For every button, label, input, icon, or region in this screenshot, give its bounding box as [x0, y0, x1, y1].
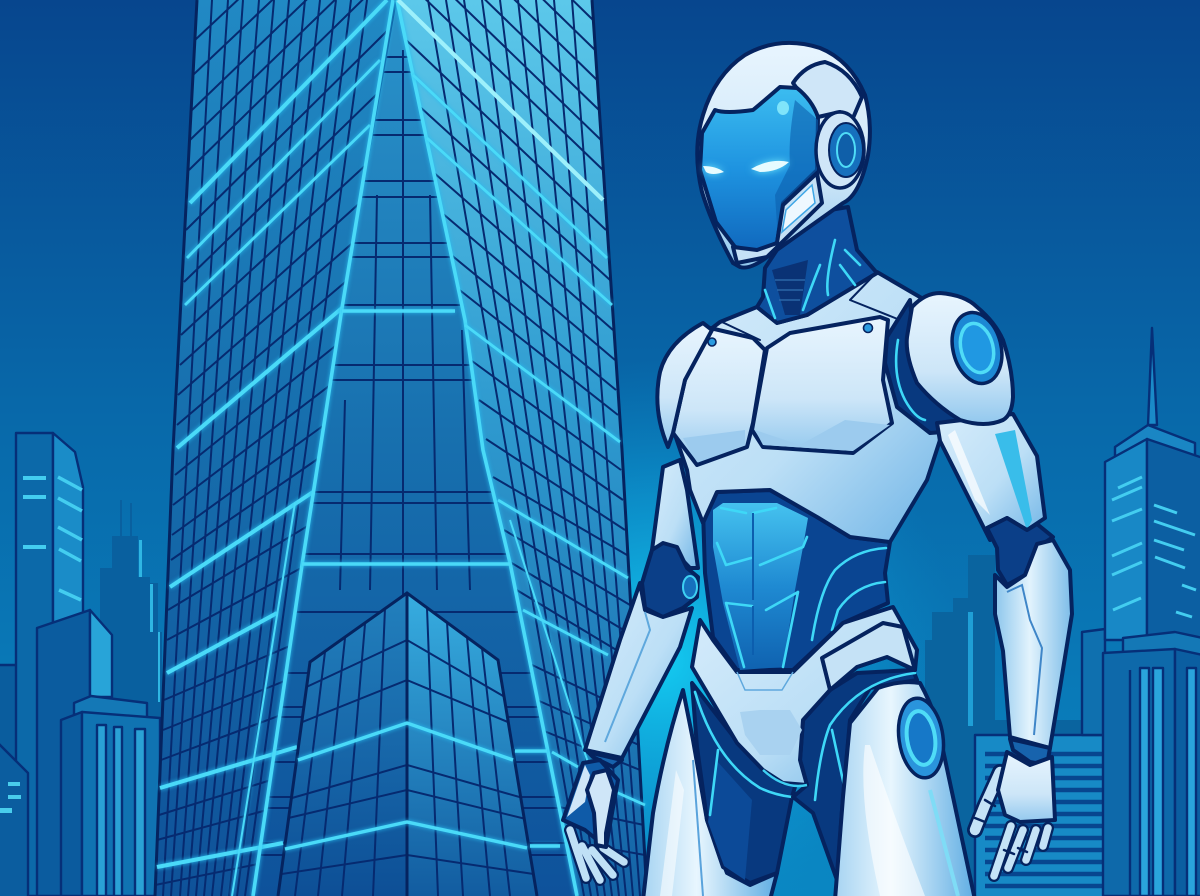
- main skyscraper: [155, 0, 647, 896]
- building: front left block with window strips: [61, 696, 160, 896]
- tower: dark outer edges: [155, 0, 647, 896]
- tower: further neon bands, right face: [413, 75, 645, 805]
- tower: neon band highlight, right face: [398, 0, 603, 200]
- building: far left lower block: [0, 665, 19, 896]
- robot: left shoulder: [657, 323, 712, 447]
- robot: crotch dark panel: [692, 683, 800, 883]
- robot: abdomen dark core: [703, 490, 890, 670]
- robot: left upper arm: [652, 460, 698, 568]
- tower: neon bands, left face: [157, 0, 387, 867]
- building: side block: [1082, 629, 1105, 735]
- head: left eye: [703, 166, 724, 174]
- podium: right face: [407, 593, 540, 896]
- head: ear disc: [816, 112, 864, 188]
- building: front right block: [1103, 632, 1200, 896]
- building: mid left block: [37, 610, 112, 896]
- head: visor: [700, 87, 818, 252]
- head: visor highlight: [777, 101, 789, 115]
- tower: thin neon bands, left face: [185, 60, 380, 305]
- building: tall right tower with spire: [1105, 328, 1200, 640]
- tower: left face: [156, 0, 392, 896]
- robot: pelvis plate: [692, 607, 917, 786]
- head: rear side panel: [793, 62, 862, 118]
- robot: right forearm: [995, 540, 1072, 748]
- podium: left face: [275, 593, 407, 896]
- head: cheek plate: [733, 173, 822, 263]
- robot: left leg: [643, 690, 777, 896]
- podium: outline: [278, 593, 537, 896]
- robot: right upper arm: [937, 414, 1045, 540]
- head: right eye: [751, 161, 789, 172]
- head: helmet shell: [697, 43, 870, 268]
- left hand: thumb finger: [587, 770, 614, 847]
- robot: right wrist: [1010, 739, 1050, 765]
- robot: right hip dark panel: [793, 670, 917, 880]
- left distant silhouette: [100, 500, 162, 896]
- robot: neck: [757, 207, 877, 323]
- robot: [563, 43, 1072, 896]
- robot: right leg: [835, 682, 975, 896]
- left hand: back plate: [567, 765, 590, 817]
- robot: right shoulder cap: [907, 293, 1013, 424]
- robot: left forearm: [585, 583, 692, 758]
- right hand: fingers and thumb: [975, 772, 1048, 876]
- podium: neon bands: [285, 723, 560, 849]
- robot: left elbow joint: [642, 543, 698, 617]
- robot: left chest plate: [673, 328, 765, 465]
- right shoulder: glowing disc: [945, 307, 1009, 389]
- robot: abdominal plates: [713, 503, 808, 670]
- building: corner block with windows: [0, 742, 28, 896]
- robot: left hand: [563, 760, 624, 880]
- right hand: back plate: [998, 752, 1055, 822]
- tower: neon bands, centre face: [302, 311, 510, 564]
- tower: centre face: [240, 0, 590, 896]
- left hand: fingers: [570, 830, 624, 880]
- building: tall left tower: [16, 433, 83, 896]
- robot: collar detail: [722, 272, 900, 340]
- robot: right shoulder connector: [885, 300, 1007, 433]
- robot: torso: [670, 272, 940, 542]
- head: visor reflection: [775, 100, 818, 240]
- robot: knee disc: [894, 695, 948, 781]
- left hand: palm: [563, 760, 618, 847]
- tower: right face: [400, 0, 644, 896]
- robot: left wrist: [588, 752, 622, 767]
- robot: head: [697, 43, 870, 268]
- left cityscape: [0, 433, 160, 896]
- front podium building: [275, 593, 560, 896]
- tower: thin secondary neon edges: [232, 503, 600, 896]
- robot: right elbow joint: [987, 518, 1053, 585]
- building: low back block with louvres: [975, 735, 1105, 896]
- robot: right hand: [975, 752, 1055, 876]
- tower: neon corner lines: [253, 0, 577, 896]
- right distant silhouette: [925, 555, 1090, 896]
- robot: hip belt: [822, 623, 915, 690]
- right cityscape: [975, 328, 1200, 896]
- robot: right chest plate: [752, 317, 892, 453]
